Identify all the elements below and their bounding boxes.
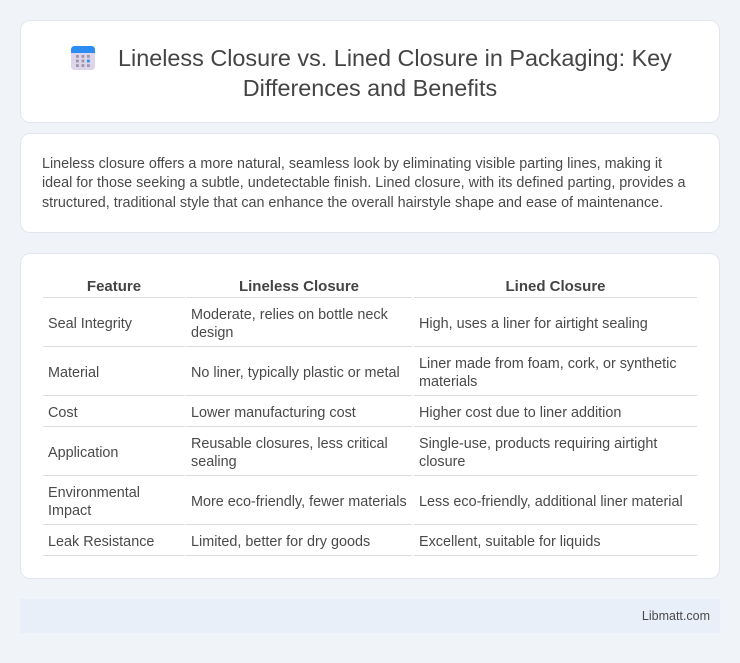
- comparison table: Reusable closures, less critical: [191, 436, 388, 452]
- comparison table: Moderate, relies on bottle neck: [191, 307, 388, 323]
- comparison table: High, uses a liner for airtight sealing: [419, 316, 648, 332]
- row: Leak Resistance: Leak Resistance: [48, 534, 154, 550]
- comparison table: Liner made from foam, cork, or synthetic: [419, 356, 677, 372]
- comparison table: Lower manufacturing cost: [191, 405, 356, 421]
- comparison table: sealing: [191, 454, 237, 470]
- row: Environmental Impact: [48, 485, 140, 519]
- description card: [20, 133, 720, 233]
- column heading: Feature: Feature: [87, 278, 141, 295]
- row: Cost: Cost: [48, 405, 78, 421]
- column heading: Lined Closure: Lined Closure: [505, 278, 606, 295]
- footer bar: [20, 599, 720, 633]
- description text: ideal for those seeking a subtle, undetectable finish. Lined closure, with its defined parting, provides a: [42, 175, 685, 191]
- title: [118, 45, 672, 101]
- description text: structured, traditional style that can enhance the overall hairstyle shape and ease of maintenance.: [42, 195, 663, 211]
- row: Seal Integrity: Seal Integrity: [48, 316, 132, 332]
- description text: Lineless closure offers a more natural, seamless look by eliminating visible parting lines, making it: [42, 156, 662, 172]
- title: Lineless Closure vs. Lined Closure in Packaging: Key: [118, 45, 672, 71]
- comparison table: Less eco-friendly, additional liner material: [419, 494, 683, 510]
- comparison table: Single-use, products requiring airtight: [419, 436, 657, 452]
- row: Application: Application: [48, 445, 118, 461]
- row: Material: Material: [48, 365, 99, 381]
- icon: calendar grid: [71, 46, 95, 70]
- comparison table: design: [191, 325, 233, 341]
- table card: [20, 253, 720, 579]
- description text: [42, 156, 686, 211]
- comparison table: Limited, better for dry goods: [191, 534, 370, 550]
- title: Differences and Benefits: [243, 75, 497, 101]
- comparison table: No liner, typically plastic or metal: [191, 365, 400, 381]
- footer source text: Libmatt.com: [642, 609, 710, 623]
- row: Environmental Impact: Impact: [48, 503, 91, 519]
- comparison table: Higher cost due to liner addition: [419, 405, 621, 421]
- comparison table: Excellent, suitable for liquids: [419, 534, 601, 550]
- comparison table: materials: [419, 374, 477, 390]
- comparison table: More eco-friendly, fewer materials: [191, 494, 407, 510]
- row: Environmental Impact: Environmental: [48, 485, 140, 501]
- header card: [20, 20, 720, 123]
- column heading: Lineless Closure: Lineless Closure: [239, 278, 359, 295]
- comparison table: closure: [419, 454, 465, 470]
